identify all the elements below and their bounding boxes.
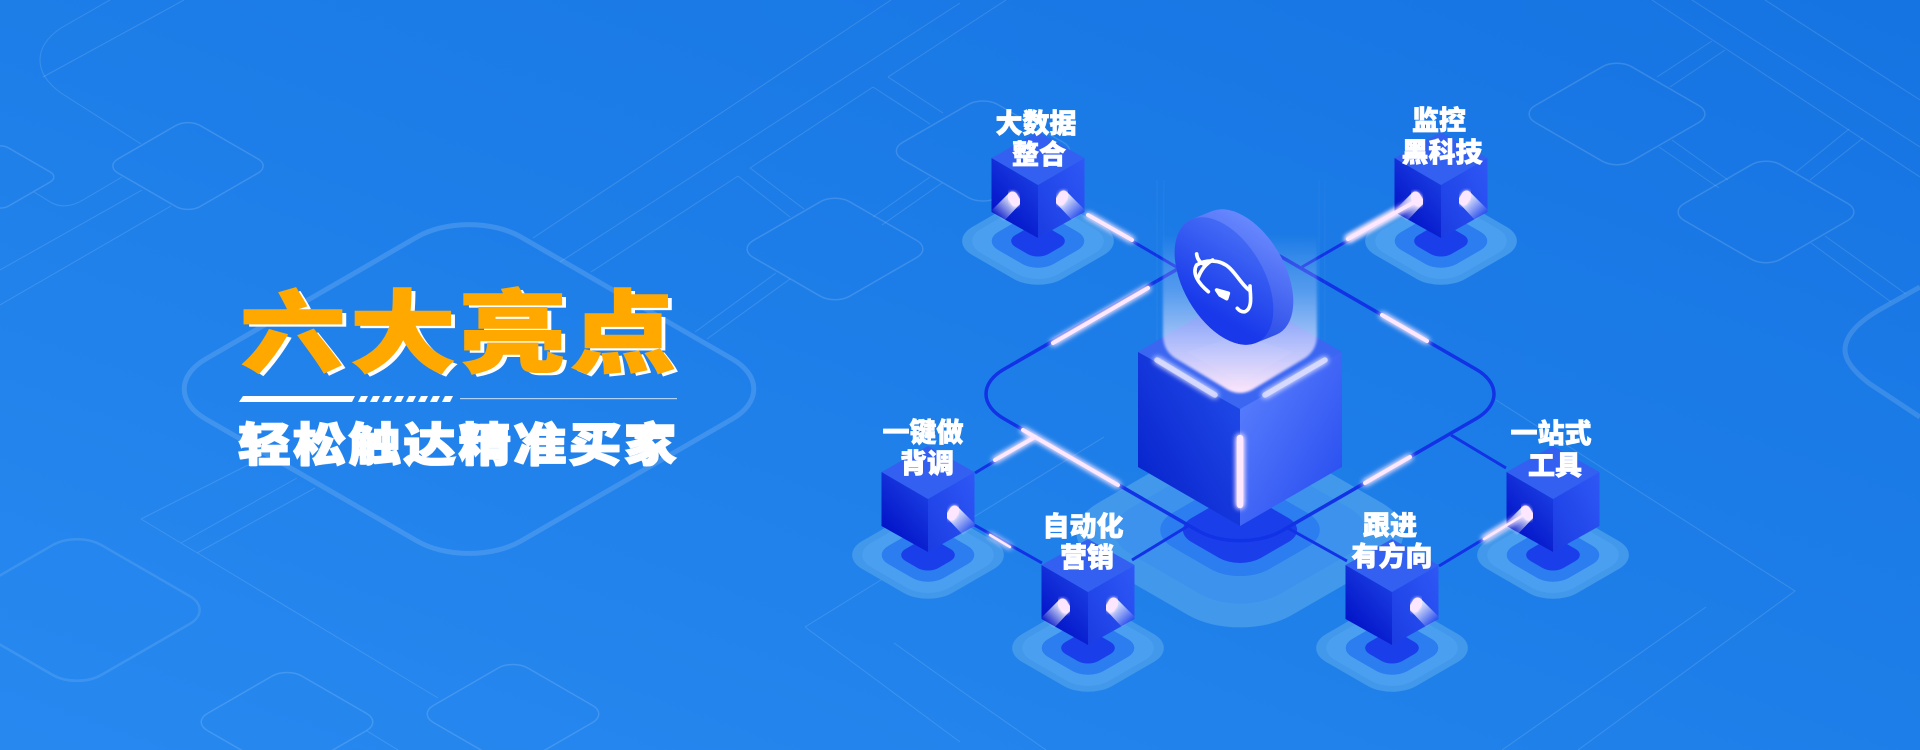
- light beam above cube: [1156, 180, 1326, 393]
- label: 大数据整合: 整合: [1012, 140, 1066, 170]
- label: 一键做背调: 背调: [900, 449, 954, 479]
- label: 自动化营销: 营销: [1060, 543, 1114, 573]
- title divider: [239, 396, 677, 402]
- label: 一站式工具: 一站式: [1510, 419, 1592, 449]
- label: 监控黑科技: 黑科技: [1402, 138, 1482, 168]
- central platform: [1046, 421, 1434, 645]
- coin with turtle logo: [1175, 196, 1273, 366]
- subtitle: 轻松触达精准买家: [238, 419, 679, 471]
- label: 跟进有方向: [1352, 511, 1432, 572]
- label: 跟进有方向: 跟进: [1363, 511, 1417, 541]
- label: 一键做背调: [882, 418, 964, 479]
- glowing circuit segments: [990, 200, 1525, 547]
- title: 六大亮点: 六大亮点: [240, 285, 680, 385]
- label: 监控黑科技: [1402, 106, 1482, 168]
- central cube: [1138, 292, 1342, 526]
- icon: turtle: [1195, 254, 1251, 312]
- label: 自动化营销: 自动化: [1042, 512, 1124, 542]
- label: 自动化营销: [1042, 512, 1124, 573]
- label: 一站式工具: [1510, 419, 1592, 481]
- label: 大数据整合: [996, 109, 1076, 170]
- label: 监控黑科技: 监控: [1412, 106, 1466, 136]
- label: 跟进有方向: 有方向: [1352, 541, 1432, 572]
- cube: 大数据整合: [990, 132, 1086, 238]
- re-drawn branch highlight over cube 2 and 6: [1348, 200, 1525, 539]
- circuit loop and branches: [953, 200, 1525, 566]
- label: 一站式工具: 工具: [1528, 451, 1582, 481]
- cube: 跟进有方向: [1346, 539, 1440, 645]
- cube: 监控黑科技: [1393, 132, 1489, 238]
- label: 大数据整合: 大数据: [996, 109, 1076, 139]
- cube: 一键做背调: [882, 446, 977, 552]
- cube: 自动化营销: [1040, 539, 1136, 645]
- central cube light bars: [1157, 360, 1325, 505]
- label: 一键做背调: 一键做: [882, 418, 964, 448]
- cube: 一站式工具: [1503, 446, 1600, 552]
- small cube platforms: [838, 189, 1643, 700]
